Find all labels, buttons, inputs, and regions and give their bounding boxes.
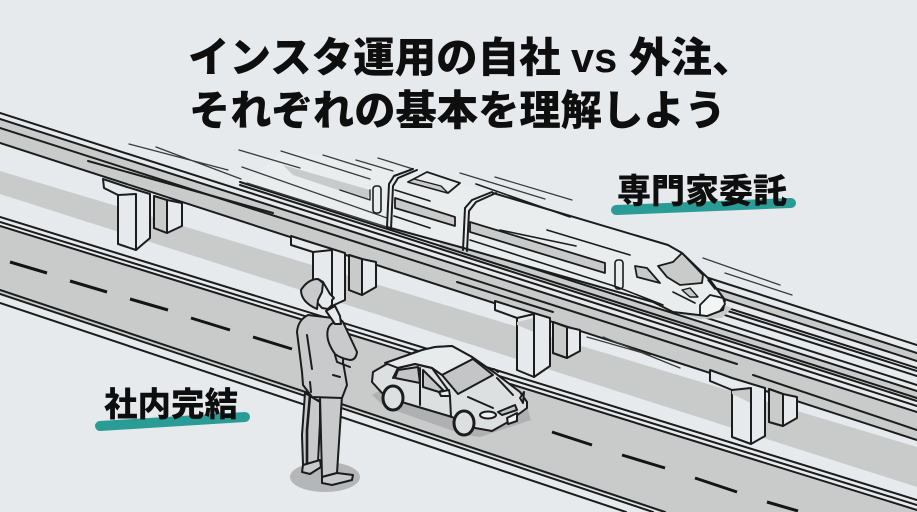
person [290, 279, 360, 492]
pier 1 [103, 179, 182, 250]
windshield [658, 253, 703, 285]
car body [372, 346, 527, 431]
front shoe [322, 473, 353, 485]
hair [301, 279, 323, 309]
title: 外注、 [629, 34, 754, 81]
bullet train [129, 144, 792, 368]
rear leg [302, 393, 320, 465]
side windows [395, 367, 420, 383]
windshield [442, 359, 493, 394]
wheels [383, 386, 474, 435]
pier 2 [291, 236, 376, 306]
lights and grille [480, 392, 524, 424]
title: vs [571, 34, 617, 81]
nose shadow [673, 305, 732, 319]
title: それぞれの基本を理解しよう [189, 88, 726, 134]
label: 専門家委託: 専門家委託 [617, 173, 787, 211]
roof [385, 346, 473, 375]
front leg [320, 396, 342, 477]
hand [326, 306, 341, 324]
nose cap [700, 295, 725, 316]
body outline [387, 193, 725, 316]
windows [395, 198, 455, 226]
piers [103, 179, 797, 444]
car [372, 346, 531, 437]
face [315, 279, 334, 309]
door [373, 186, 381, 213]
car shadow [372, 380, 531, 437]
pier 4 [710, 370, 797, 444]
rear shoe [302, 460, 321, 474]
rear window [283, 165, 370, 200]
elevated viaduct [0, 113, 917, 440]
jacket [297, 315, 347, 398]
title [188, 34, 754, 134]
joints [387, 169, 417, 229]
pier 3 [495, 301, 580, 377]
road [0, 217, 917, 512]
motion lines [129, 144, 792, 368]
label: 社内完結: 社内完結 [104, 387, 238, 424]
mirror [439, 390, 450, 396]
arm [327, 312, 357, 360]
title: インスタ運用の自社 [188, 34, 561, 81]
floor shadow [290, 462, 360, 492]
ground shadow band [0, 171, 917, 487]
roof unit [408, 172, 460, 193]
